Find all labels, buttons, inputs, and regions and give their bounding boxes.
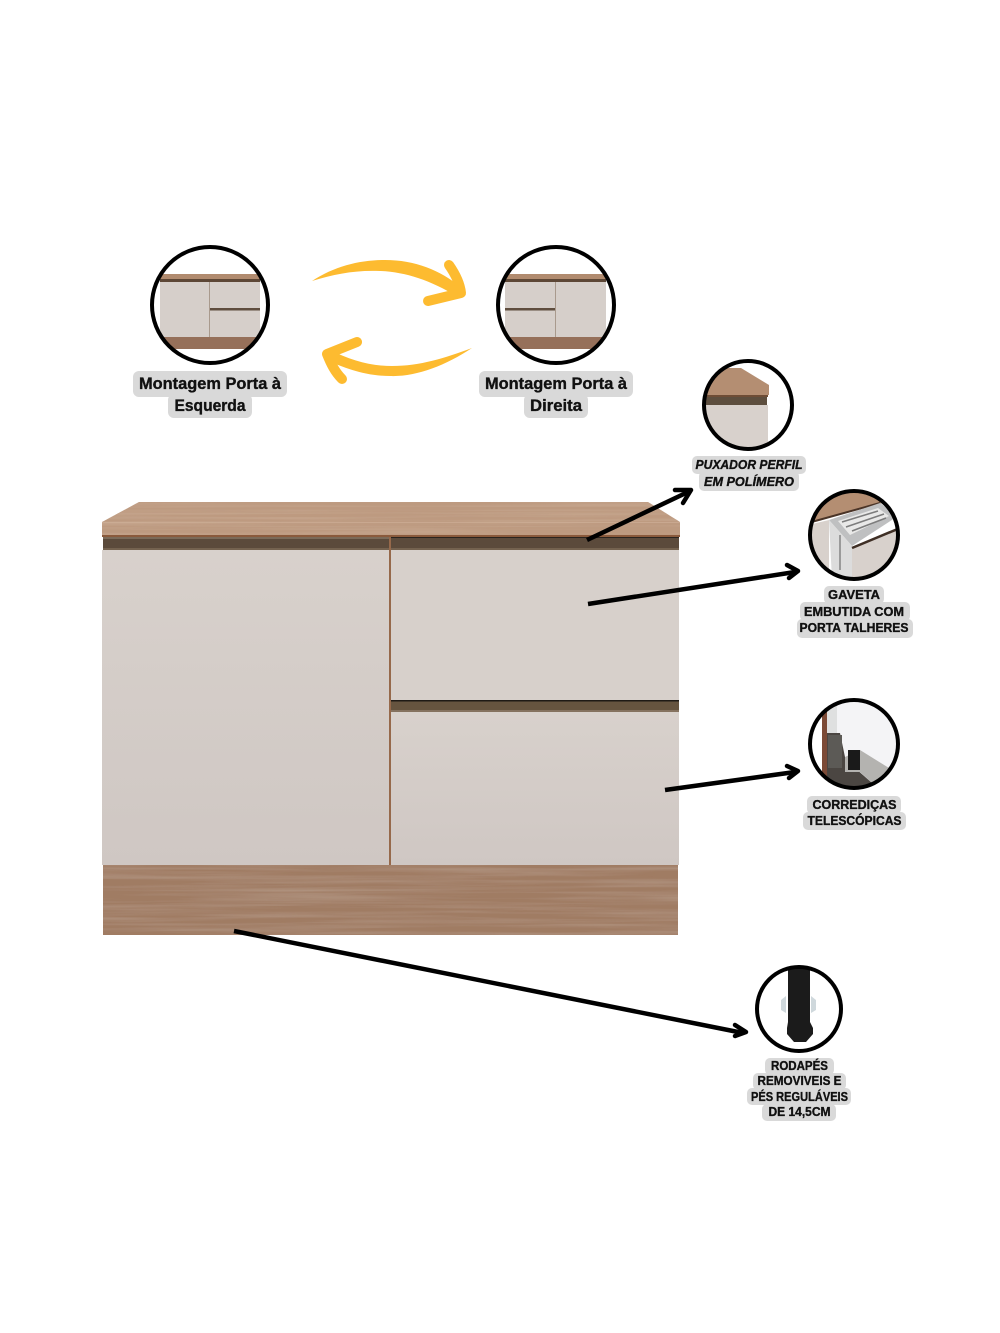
label: telescopic slides: [803, 796, 906, 830]
label: built-in drawer: EMBUTIDA COM: [804, 605, 904, 619]
detail circle: door on the right: [496, 245, 616, 365]
label: polymer handle: PUXADOR PERFIL: [696, 458, 802, 472]
label: built-in drawer: GAVETA: [828, 588, 880, 602]
upper drawer handle profile: [391, 537, 679, 550]
arrow: yellow swap, right to left: [326, 342, 472, 379]
label: removable plinth and adjustable feet: REMOVIVEIS E: [758, 1074, 842, 1088]
label: removable plinth and adjustable feet: RODAPÉS: [771, 1058, 828, 1073]
label: removable plinth and adjustable feet: PÉS REGULÁVEIS: [751, 1089, 848, 1104]
label: built-in drawer: [797, 586, 913, 638]
label: telescopic slides: TELESCÓPICAS: [808, 813, 902, 828]
label: left-door assembly: Esquerda: [174, 397, 246, 415]
detail circle: door on the left: [150, 245, 270, 365]
label: polymer handle: [692, 456, 806, 491]
lower drawer front: [390, 712, 679, 865]
left door: [102, 550, 390, 865]
detail circle: polymer handle: [700, 358, 796, 455]
label: telescopic slides: CORREDIÇAS: [812, 798, 896, 812]
arrow: to polymer handle: [587, 490, 691, 540]
detail circle: telescopic slides: [808, 698, 900, 790]
arrow: to built-in drawer: [588, 565, 798, 604]
label: left-door assembly: Montagem Porta à: [139, 375, 282, 393]
label: built-in drawer: PORTA TALHERES: [800, 621, 908, 635]
cabinet illustration: [102, 502, 680, 935]
lower drawer handle profile: [391, 700, 679, 712]
arrow: yellow swap, left to right: [312, 260, 462, 301]
vertical gap between door and drawers: [389, 537, 391, 866]
label: left-door assembly: [133, 371, 287, 418]
label: right-door assembly: [479, 371, 633, 418]
detail circle: adjustable feet: [755, 965, 843, 1053]
arrow: to adjustable feet: [234, 931, 746, 1036]
label: right-door assembly: Montagem Porta à: [485, 375, 628, 393]
door handle profile: [103, 537, 389, 550]
upper drawer front: [390, 550, 679, 700]
label: removable plinth and adjustable feet: DE 14,5CM: [768, 1105, 830, 1119]
label: right-door assembly: Direita: [530, 397, 583, 415]
arrow: to telescopic slides: [665, 766, 798, 790]
detail circle: built-in drawer: [808, 489, 900, 581]
countertop: [102, 502, 680, 537]
plinth: [103, 865, 678, 935]
label: polymer handle: EM POLÍMERO: [704, 474, 794, 489]
label: removable plinth and adjustable feet: [747, 1058, 851, 1121]
